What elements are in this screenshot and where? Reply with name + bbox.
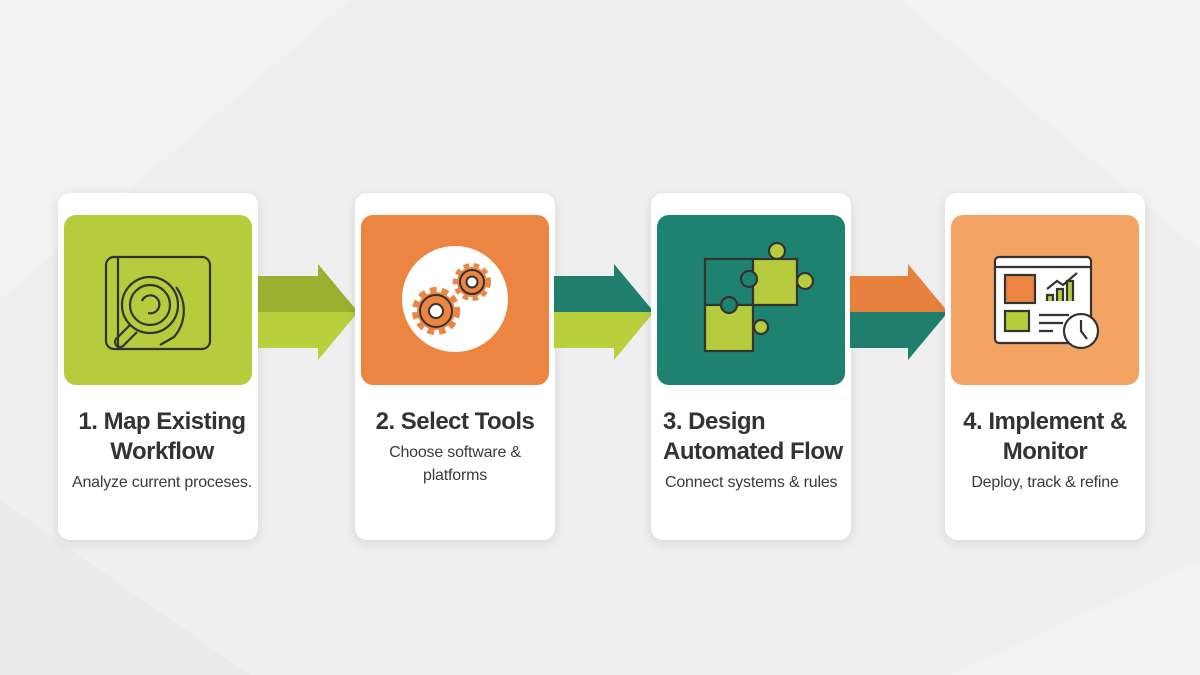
title 1: [72, 408, 252, 491]
title 2: Choose software &: [389, 444, 521, 461]
card 2: [355, 193, 555, 540]
title 3: Automated Flow: [663, 438, 843, 465]
card 1: [58, 193, 258, 540]
title 4: [963, 408, 1127, 491]
icon panel: puzzle: [657, 215, 845, 385]
icon panel: dashboard: [951, 215, 1139, 385]
title 2: [376, 408, 534, 484]
icon panel: map: [64, 215, 252, 385]
title 1: Workflow: [110, 438, 214, 465]
card 3: [651, 193, 851, 540]
title 3: 3. Design: [663, 408, 765, 435]
card 4: [945, 193, 1145, 540]
title 4: Deploy, track & refine: [971, 474, 1119, 491]
arrow 2: [554, 264, 651, 360]
icon panel: gears: [361, 215, 549, 385]
title 2: platforms: [423, 467, 487, 484]
title 4: Monitor: [1003, 438, 1087, 465]
arrow 3: [850, 264, 945, 360]
title 1: 1. Map Existing: [78, 408, 246, 435]
title 4: 4. Implement &: [963, 408, 1127, 435]
title 2: 2. Select Tools: [376, 408, 534, 435]
title 3: Connect systems & rules: [665, 474, 837, 491]
arrow 1: [258, 264, 355, 360]
title 3: [663, 408, 844, 491]
title 1: Analyze current proceses.: [72, 474, 252, 491]
